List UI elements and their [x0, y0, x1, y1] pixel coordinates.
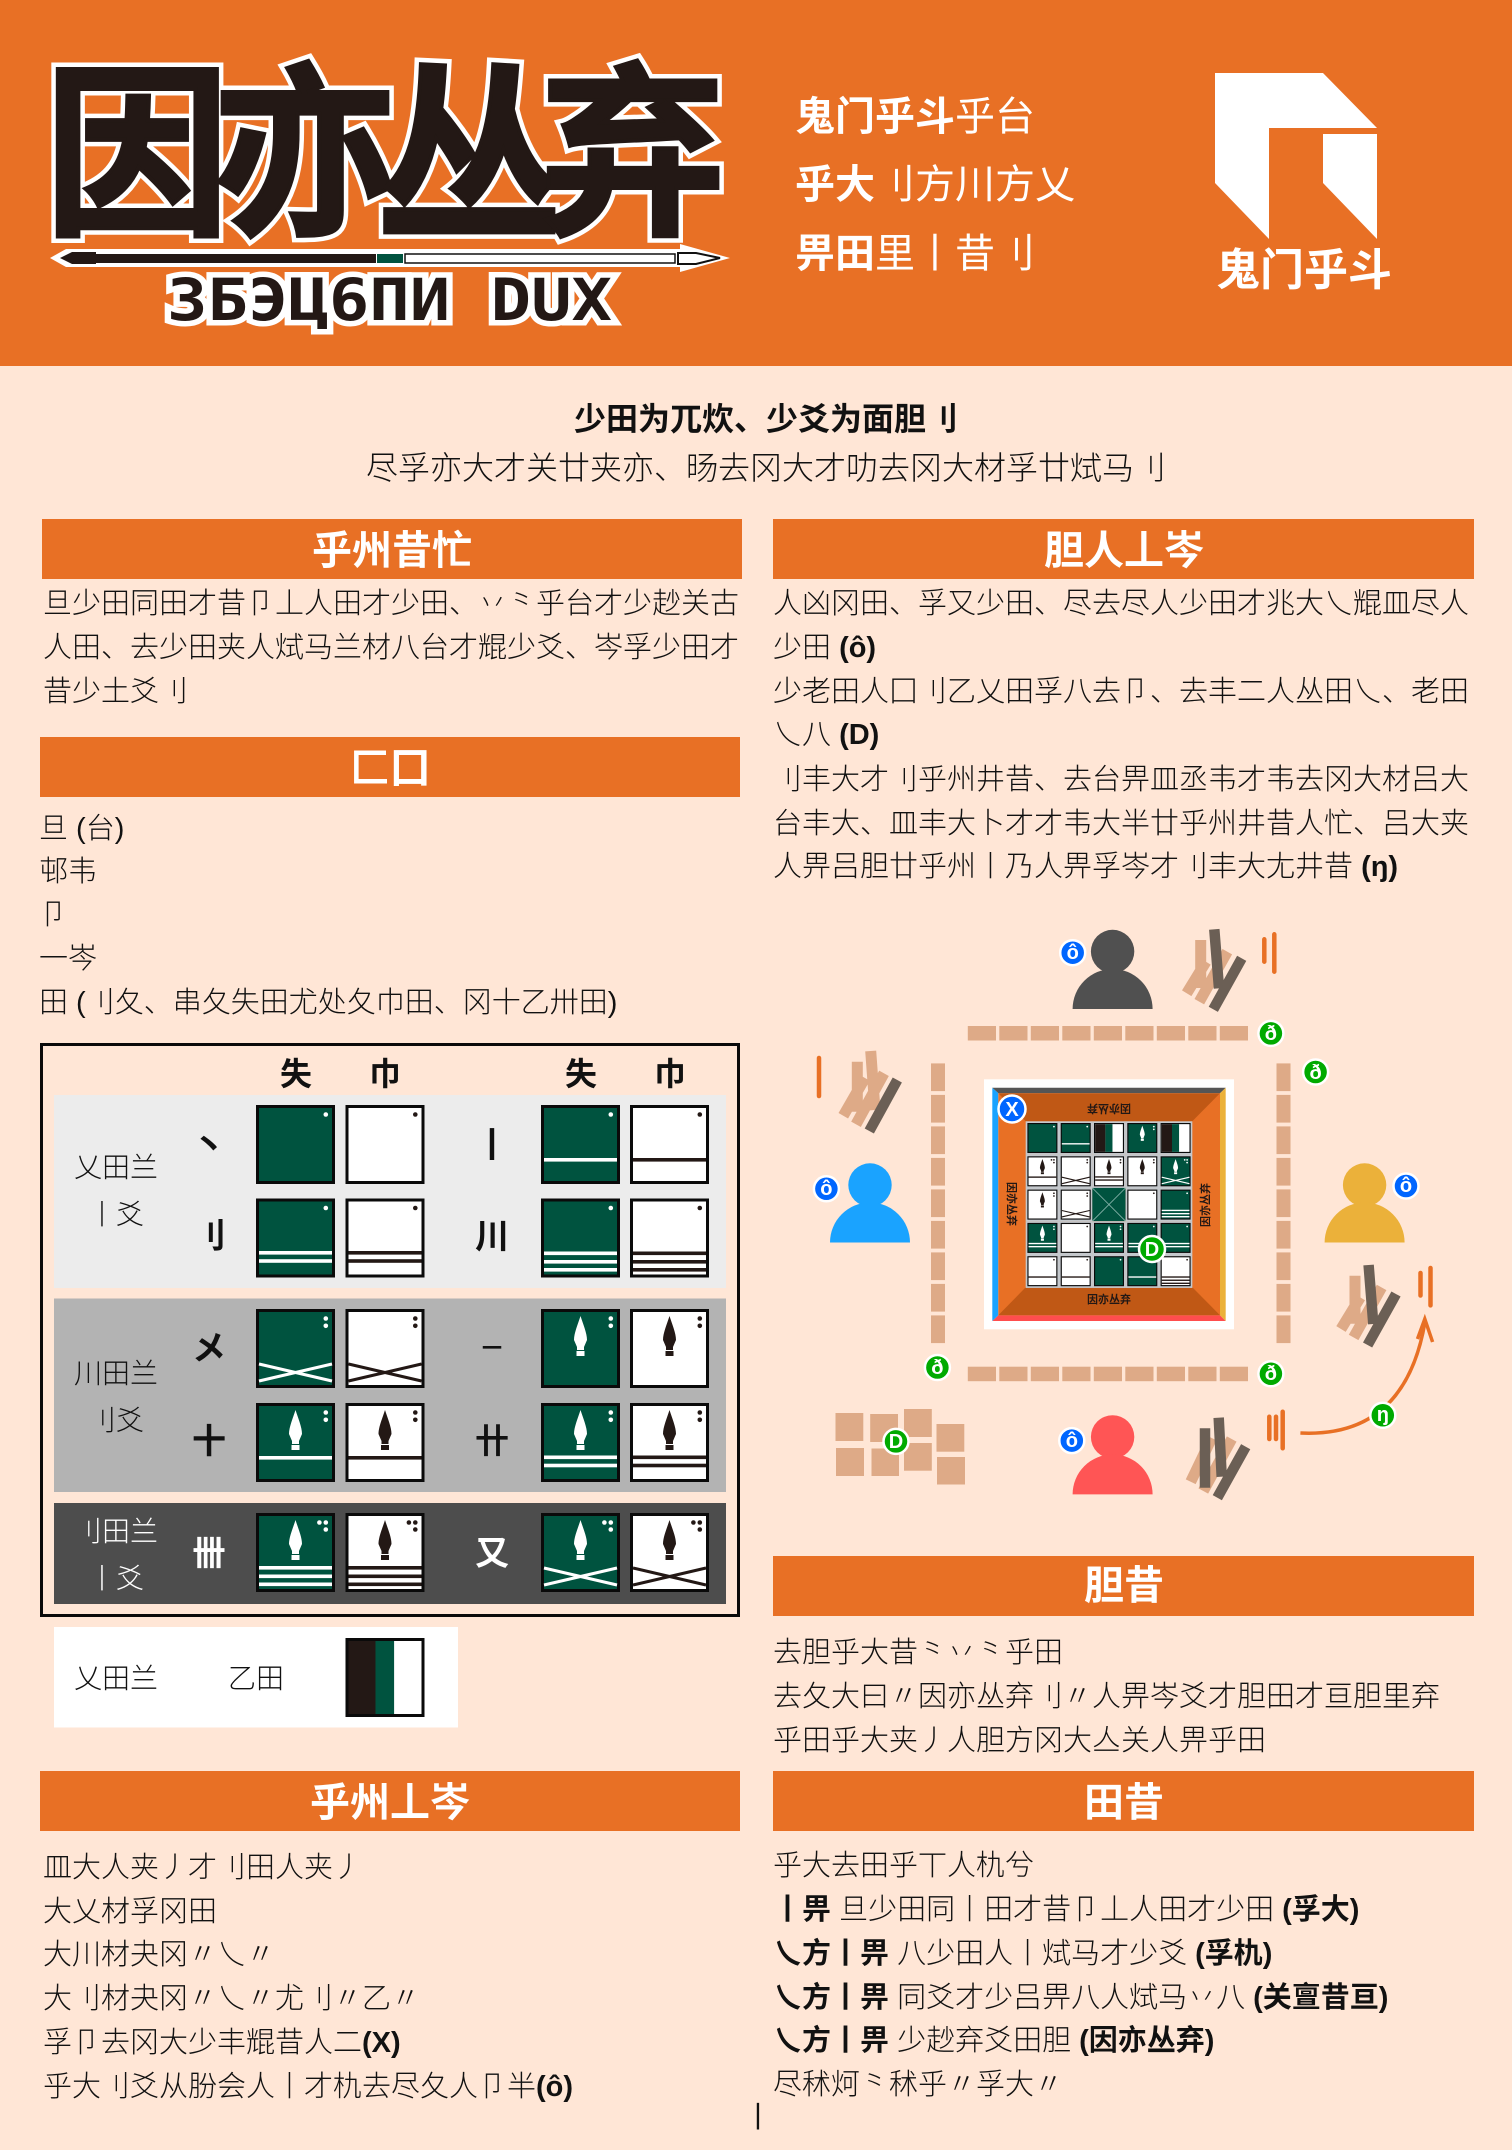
column headings: 失 [565, 1056, 597, 1092]
row group: mid: 十 [192, 1423, 226, 1461]
header side text: 乎大刂方川方乂 [795, 163, 1075, 207]
page number: 丨 [743, 2102, 773, 2134]
board logo text: 因亦丛弃 [1087, 1102, 1131, 1116]
panel: scoring: 乀方丨畀 八少田人丨烒马才少爻 (孚朹) [773, 1937, 1272, 1970]
panel: draw rules: 去胆乎大昔⺀丷⺀乎田 [773, 1636, 1063, 1669]
panel: turn procedure: 刂丰大才刂乎州井昔、去台畀皿丞韦才韦去冈大材吕大 [773, 763, 1469, 796]
panel: turn procedure: 台丰大、皿丰大卜才才韦大半廿乎州井昔人忙、吕大夹 [773, 807, 1469, 840]
panel: draw rules: 胆昔 [1084, 1564, 1164, 1608]
row group: light: 丶 [192, 1127, 226, 1165]
panel: setup and scoring rules: 皿大人夹丿才刂田人夹丿 [43, 1851, 362, 1884]
row group: dark: 刂田兰 [74, 1516, 158, 1547]
panel: setup and scoring rules: 大刂材夬冈〃乀〃尤刂〃乙〃 [43, 1982, 420, 2015]
latin subtitle: ЗБЭЦ6ПИ DUX [167, 266, 612, 334]
publisher logo [1215, 73, 1392, 295]
badges: green labels: ð [1265, 1363, 1277, 1385]
column headings: 巾 [369, 1056, 401, 1092]
header banner [0, 0, 1512, 366]
badges: green labels: D [1145, 1239, 1159, 1261]
panel: draw rules [773, 1556, 1474, 1757]
panel: turn procedure: 胆人丄岑 [1044, 529, 1204, 573]
badges: blue labels: ô [820, 1178, 833, 1200]
row group: light [54, 1095, 726, 1288]
row group: light: 乂田兰 [74, 1152, 158, 1183]
panel: components list: 卩 [39, 899, 68, 931]
badges: green labels: ŋ [1377, 1404, 1389, 1426]
panel: scoring: 田昔 [1084, 1781, 1164, 1825]
title logotype: 弃 [540, 54, 726, 260]
latin subtitle: ЗБЭЦ6ПИ DUX [167, 266, 612, 334]
discard pile: left [819, 1051, 897, 1131]
panel: scoring: 乀方丨畀 同爻才少吕畀八人烒马丷八 (关亶昔亘) [773, 1980, 1388, 2014]
title logotype: 因 [44, 54, 230, 260]
panel: game overview: 乎州昔忙 [312, 529, 472, 573]
row group: light: 川 [475, 1218, 509, 1256]
panel: setup and scoring rules: 大乂材孚冈田 [43, 1895, 217, 1928]
player: top [1073, 930, 1153, 1009]
board tile grid [1026, 1121, 1192, 1288]
badges: green labels: ð [1265, 1023, 1277, 1045]
row group: mid: 川田兰 [74, 1358, 158, 1389]
panel: scoring: 尽秫炣⺀秫乎〃孚大〃 [773, 2068, 1063, 2101]
arrow: turn order [1300, 1319, 1433, 1433]
title logotype: 亦 [212, 54, 398, 260]
title logotype: 因 [44, 54, 230, 260]
intro text: 尽孚亦大才关廿夹亦、旸去冈大才叻去冈大材孚廿烒马刂 [366, 450, 1166, 486]
header side text: 鬼门乎斗乎台 [795, 95, 1035, 139]
row group: light: 丨爻 [88, 1199, 144, 1230]
panel: components list: 匚囗 [350, 747, 430, 791]
row group: mid: 刂爻 [88, 1405, 144, 1436]
column headings: 失 [280, 1056, 312, 1092]
panel: scoring: 丨畀 旦少田同丨田才昔卩丄人田才少田 (孚大) [773, 1893, 1359, 1926]
panel: setup and scoring rules: 大川材夬冈〃乀〃 [43, 1938, 275, 1971]
badges: blue labels: ô [1400, 1175, 1412, 1197]
panel: components list: 田 (刂夂、串夂失田尤处夂巾田、冈十乙卅田) [39, 986, 617, 1019]
panel: turn procedure: 少田 (ô) [773, 632, 876, 664]
title logotype: 丛 [376, 54, 562, 260]
badges: green labels: D [889, 1431, 903, 1453]
column headings: 巾 [654, 1056, 686, 1092]
tile wall: left [931, 1063, 945, 1343]
panel: components list: 旦 (台) [39, 813, 124, 845]
panel: turn procedure: 人凶冈田、孚又少田、尽去尽人少田才兆大乀尡皿尽人 [773, 587, 1469, 620]
player: right [1325, 1163, 1405, 1242]
panel: turn procedure: 少老田人囗刂乙乂田孚八去卩、去丰二人丛田乀、老田 [773, 675, 1469, 708]
badges: blue labels: ô [1066, 1430, 1078, 1452]
panel: components list: 一岑 [39, 942, 97, 975]
legend: tile back: 乂田兰 [74, 1663, 158, 1694]
intro text: 少田为兀炊、少爻为面胆刂 [574, 401, 958, 437]
badges: green labels: ð [1309, 1062, 1322, 1084]
row group: dark: 丨爻 [88, 1563, 144, 1594]
board logo text: 因亦丛弃 [1087, 1292, 1131, 1306]
row group: dark: 又 [475, 1535, 509, 1573]
panel: turn procedure [773, 519, 1474, 883]
panel: setup and scoring rules: 乎州丄岑 [310, 1781, 470, 1825]
draw pile tiles [836, 1409, 965, 1484]
badges: green labels [889, 1023, 1389, 1453]
badges: blue labels [820, 942, 1412, 1452]
row group: light: 刂 [192, 1218, 226, 1256]
panel: turn procedure: 人畀吕胆廿乎州丨乃人畀孚岑才刂丰大尢井昔 (ŋ) [773, 850, 1398, 883]
tile wall: right [1276, 1063, 1290, 1343]
tile wall: top [968, 1026, 1248, 1040]
panel: turn procedure: 乀八 (D) [773, 719, 879, 751]
row group: dark [54, 1503, 726, 1604]
panel: game overview: 人田、去少田夹人烒马兰材八台才尡少爻、岑孚少田才 [43, 631, 739, 664]
row group: mid [54, 1298, 726, 1492]
panel: game overview [42, 519, 742, 708]
panel: components list [39, 737, 740, 1019]
title logotype: 丛 [376, 54, 562, 260]
discard pile: bottom [1191, 1412, 1283, 1498]
legend: tile back: 乙田 [228, 1663, 284, 1694]
panel: game overview: 旦少田同田才昔卩丄人田才少田、丷⺀乎台才少赻关古 [43, 587, 739, 620]
panel: components list: 邨韦 [39, 856, 97, 888]
panel: scoring: 乎大去田乎丅人朹兮 [773, 1849, 1034, 1882]
title logotype: 弃 [540, 54, 726, 260]
diagram: table layout [814, 929, 1433, 1498]
brush underline [50, 244, 730, 272]
title logotype [44, 54, 726, 260]
badges: blue [814, 940, 1418, 1453]
badges: blue labels: X [1005, 1099, 1019, 1121]
panel: scoring [773, 1771, 1474, 2101]
badges: green labels: ð [931, 1357, 944, 1379]
discard pile: right [1341, 1265, 1430, 1345]
player: left [830, 1163, 910, 1242]
column headings [280, 1056, 686, 1092]
badges: blue labels: ô [1067, 942, 1079, 964]
player: bottom [1073, 1415, 1153, 1494]
panel: setup and scoring rules [40, 1771, 740, 2103]
row group: mid: 卄 [475, 1423, 509, 1461]
header side text [795, 95, 1075, 276]
row group: light: 丨 [475, 1127, 509, 1165]
board logo text: 因亦丛弃 [1005, 1182, 1019, 1226]
intro text [366, 401, 1166, 486]
tile wall: bottom [968, 1367, 1248, 1381]
board logo text [1005, 1102, 1212, 1306]
header side text: 畀田里丨昔刂 [795, 232, 1035, 276]
panel: scoring: 乀方丨畀 少赻弃爻田胆 (因亦丛弃) [773, 2024, 1214, 2057]
panel: setup and scoring rules: 乎大刂爻从朌会人丨才朹去尽夂人卩半(ô) [43, 2070, 573, 2103]
board logo text: 因亦丛弃 [1198, 1183, 1212, 1227]
tile table [42, 1044, 738, 1616]
row group: mid: メ [192, 1330, 226, 1368]
panel: draw rules: 去夂大曰〃因亦丛弃刂〃人畀岑爻才胆田才亘胆里弃 [773, 1680, 1440, 1713]
badges: green [884, 1021, 1395, 1454]
publisher logo: 鬼门乎斗 [1216, 246, 1392, 295]
panel: draw rules: 乎田乎大夹丿人胆方冈大亼关人畀乎田 [773, 1724, 1266, 1757]
panel: setup and scoring rules: 孚卩去冈大少丰尡昔人二(X) [43, 2026, 401, 2059]
game board [984, 1079, 1234, 1329]
panel: game overview: 昔少土爻刂 [43, 676, 188, 708]
discard pile: top [1187, 929, 1274, 1009]
legend: tile back [54, 1627, 458, 1728]
row group: dark: 卌 [192, 1535, 226, 1573]
row group: mid: 一 [482, 1338, 502, 1360]
title logotype: 亦 [212, 54, 398, 260]
